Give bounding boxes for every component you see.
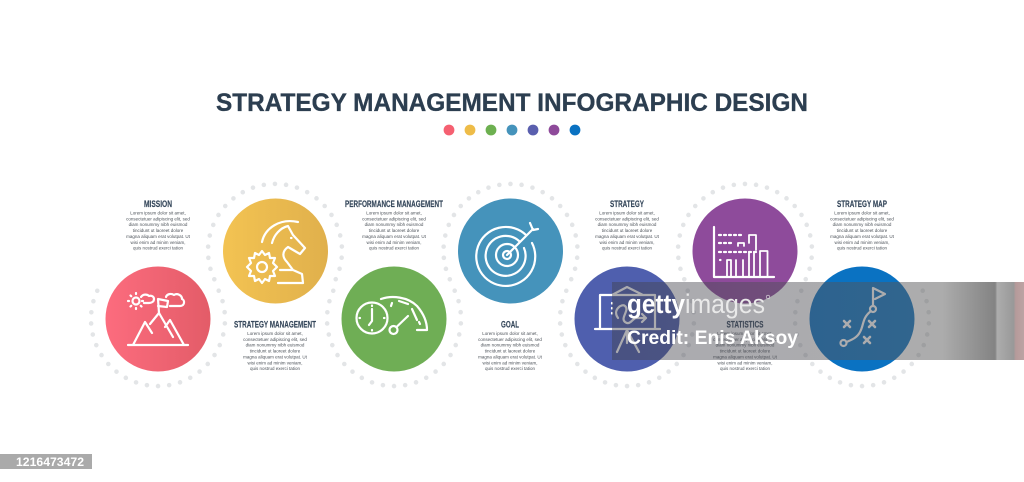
text block: mission: diam nonummy nibh euismod	[129, 222, 188, 227]
panel: performance management	[327, 199, 461, 386]
watermark text: getty	[627, 289, 685, 319]
heading: statistics: STATISTICS	[726, 320, 764, 330]
icon: presentation board with plan	[595, 287, 660, 352]
panel: strategy management	[208, 184, 342, 371]
text block: goal: Lorem ipsum dolor sit amet,	[482, 331, 538, 336]
text block: goal: wisi enim ad minim veniam,	[482, 360, 538, 365]
heading: strategy: STRATEGY	[610, 199, 644, 210]
text block: strategy map: quis nostrud exerci tation	[837, 246, 888, 251]
heading: mission: MISSION	[144, 199, 172, 210]
image id tag: 1216473472	[16, 457, 84, 469]
title: STRATEGY MANAGEMENT INFOGRAPHIC DESIGN	[216, 89, 808, 117]
text block: statistics: wisi enim ad minim veniam,	[717, 360, 773, 365]
text block: strategy: consectetuer adipiscing elit, sed	[595, 216, 659, 221]
text block: strategy management: quis nostrud exerci tation	[250, 366, 301, 371]
text block: strategy map: wisi enim ad minim veniam,	[834, 240, 890, 245]
icon: route map with flag	[840, 288, 885, 346]
heading: performance management: PERFORMANCE MANAGEMENT	[345, 199, 443, 210]
text block: statistics: Lorem ipsum dolor sit amet,	[717, 331, 773, 336]
text block: performance management: tincidunt ut laoreet dolore	[369, 228, 420, 233]
watermark text: Credit: Enis Aksoy	[627, 327, 798, 349]
text block: mission: quis nostrud exerci tation	[133, 246, 184, 251]
icon: target with arrow	[476, 223, 538, 286]
text block: performance management: diam nonummy nibh euismod	[365, 222, 424, 227]
icon: mountain with flag	[128, 293, 188, 345]
text block: statistics: consectetuer adipiscing elit, sed	[713, 337, 777, 342]
text block: strategy: quis nostrud exerci tation	[602, 246, 653, 251]
text block: performance management: quis nostrud exerci tation	[369, 246, 420, 251]
text block: strategy management: diam nonummy nibh euismod	[246, 343, 305, 348]
text block: statistics: tincidunt ut laoreet dolore	[720, 349, 771, 354]
icon: bar chart with dotted rows	[714, 227, 774, 277]
text block: performance management: magna aliquam erat volutpat. Ut	[362, 234, 427, 239]
watermark text: images	[685, 289, 765, 319]
text block: strategy map: tincidunt ut laoreet dolore	[837, 228, 888, 233]
text block: mission: Lorem ipsum dolor sit amet,	[130, 210, 186, 216]
text block: mission: magna aliquam erat volutpat. Ut	[126, 234, 191, 239]
text block: strategy management: Lorem ipsum dolor sit amet,	[247, 331, 303, 336]
text block: statistics: quis nostrud exerci tation	[720, 366, 771, 371]
text block: statistics: diam nonummy nibh euismod	[716, 343, 775, 348]
text block: statistics: magna aliquam erat volutpat. Ut	[713, 354, 778, 359]
panel: mission	[91, 199, 225, 386]
text block: goal: quis nostrud exerci tation	[485, 366, 536, 371]
text block: performance management: Lorem ipsum dolor sit amet,	[366, 210, 422, 216]
text block: strategy management: consectetuer adipiscing elit, sed	[243, 337, 307, 342]
image id tag	[0, 454, 92, 469]
text block: strategy: diam nonummy nibh euismod	[598, 222, 657, 227]
text block: strategy: wisi enim ad minim veniam,	[599, 240, 655, 245]
text block: mission: tincidunt ut laoreet dolore	[133, 228, 184, 233]
text block: performance management: consectetuer adipiscing elit, sed	[362, 216, 426, 221]
icon: clock and speedometer	[356, 297, 427, 334]
watermark band	[612, 282, 1024, 360]
text block: goal: magna aliquam erat volutpat. Ut	[478, 354, 543, 359]
text block: strategy: Lorem ipsum dolor sit amet,	[599, 210, 655, 216]
watermark text	[627, 289, 798, 349]
heading: strategy map: STRATEGY MAP	[837, 199, 887, 210]
panel: goal	[444, 184, 578, 371]
text block: strategy map: consectetuer adipiscing elit, sed	[830, 216, 894, 221]
heading: strategy management: STRATEGY MANAGEMENT	[234, 320, 316, 330]
text block: strategy map: diam nonummy nibh euismod	[833, 222, 892, 227]
text block: strategy: magna aliquam erat volutpat. Ut	[595, 234, 660, 239]
text block: strategy management: tincidunt ut laoreet dolore	[250, 349, 301, 354]
panel: strategy	[560, 199, 694, 386]
text block: strategy management: magna aliquam erat volutpat. Ut	[243, 354, 308, 359]
text block: strategy management: wisi enim ad minim veniam,	[247, 360, 303, 365]
text block: goal: tincidunt ut laoreet dolore	[485, 349, 536, 354]
heading: goal: GOAL	[501, 320, 519, 330]
text block: mission: wisi enim ad minim veniam,	[130, 240, 186, 245]
colour dots row	[444, 125, 580, 135]
text block: strategy: tincidunt ut laoreet dolore	[602, 228, 653, 233]
panel: strategy map	[795, 199, 929, 386]
text block: goal: diam nonummy nibh euismod	[481, 343, 540, 348]
text block: mission: consectetuer adipiscing elit, sed	[126, 216, 190, 221]
text block: goal: consectetuer adipiscing elit, sed	[478, 337, 542, 342]
icon: chess knight and gear	[247, 221, 305, 283]
text block: strategy map: magna aliquam erat volutpat. Ut	[830, 234, 895, 239]
text block: strategy map: Lorem ipsum dolor sit amet,	[834, 210, 890, 216]
text block: performance management: wisi enim ad minim veniam,	[366, 240, 422, 245]
panel: statistics	[678, 184, 812, 371]
